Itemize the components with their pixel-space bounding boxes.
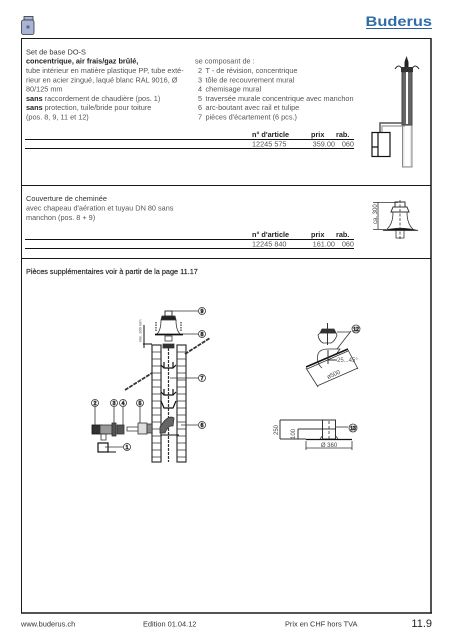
- description: base set: (pos. 8, 9, 11 et 12): [26, 112, 89, 122]
- footer: Edition 01.04.12: [143, 620, 196, 628]
- price table: base set: n° d'article: [252, 130, 289, 139]
- price table: chimney cover: n° d'article: [252, 230, 289, 239]
- diagram: pitched roof tile: 12: [353, 327, 359, 333]
- position callouts: 5: [139, 401, 142, 407]
- price table: chimney cover: 12245 840: [252, 239, 286, 248]
- roof cap: [155, 311, 183, 348]
- diagram: installation in chimney: [92, 308, 210, 462]
- position callouts: 6: [201, 423, 204, 429]
- price table: base set: 359.00: [313, 139, 335, 148]
- diagram: pitched roof tile: 25...45°: [337, 358, 358, 364]
- footer: Prix en CHF hors TVA: [285, 620, 357, 628]
- parts list: [195, 57, 354, 122]
- position callouts: 8: [201, 332, 204, 338]
- diagram: flat roof tile: 100: [291, 428, 297, 439]
- leader lines: [95, 311, 198, 447]
- description: chimney cover: [26, 204, 174, 222]
- description: chimney cover: avec chapeau d'aération et tuyau DN 80 sans: [26, 204, 174, 212]
- price table: base set: rab.: [336, 130, 349, 139]
- logo: Buderus: Buderus: [366, 14, 432, 29]
- diagram: flat roof tile: 13: [350, 426, 356, 432]
- description: base set: [26, 57, 184, 122]
- price table: base set: 060: [342, 139, 354, 148]
- price table: chimney cover: rab.: [336, 230, 349, 239]
- price table: base set: 12245 575: [252, 139, 286, 148]
- description: chimney cover: manchon (pos. 8 + 9): [26, 213, 95, 222]
- price table: chimney cover: prix: [311, 230, 324, 239]
- boiler connection: [92, 417, 179, 452]
- parts list: 7: [198, 112, 202, 122]
- price table: chimney cover: 060: [342, 239, 354, 248]
- parts list: 5: [198, 94, 202, 103]
- description: base set: 80/125 mm: [26, 85, 63, 94]
- price table: chimney cover: 161.00: [313, 239, 335, 248]
- brick walls: [152, 345, 186, 462]
- position callouts: 1: [126, 445, 129, 451]
- description: base set: sans raccordement de chaudière (pos. 1): [26, 94, 160, 103]
- position callouts: 7: [201, 376, 204, 382]
- heading: chimney cover: Couverture de cheminée: [26, 194, 107, 203]
- parts list: pièces d'écartement (6 pcs.): [206, 112, 297, 122]
- flue pipe: [161, 348, 176, 462]
- description: base set: rieur en acier zingué, laqué blanc RAL 9016, Ø: [26, 75, 178, 84]
- parts list: 3: [198, 75, 202, 84]
- price table: chimney cover: [25, 230, 354, 249]
- position callouts: 3: [113, 401, 116, 407]
- position callouts: 9: [201, 309, 204, 315]
- parts list: arc-boutant avec rail et tulipe: [206, 103, 299, 112]
- panel: chimney cover: [25, 194, 418, 249]
- footer: 11.9: [411, 618, 432, 630]
- footer: [20, 618, 432, 630]
- dimension: [138, 320, 152, 348]
- description: base set: concentrique, air frais/gaz brûlé,: [26, 57, 138, 66]
- parts list: traversée murale concentrique avec manchon: [206, 94, 354, 103]
- panel: base set: [25, 48, 419, 167]
- price table: base set: [25, 130, 354, 149]
- description: base set: tube intérieur en matière plastique PP, tube exté-: [26, 66, 184, 75]
- roof strips: [125, 338, 210, 390]
- parts list: 2: [198, 66, 202, 75]
- diagram: flat roof tile: 250: [274, 424, 280, 435]
- position callouts: 2: [94, 401, 97, 407]
- footer: www.buderus.ch: [20, 620, 75, 628]
- diagram: chimney cover dimension: ca. 300: [373, 204, 379, 224]
- diagram: flat roof tile: [274, 420, 357, 450]
- parts list: T - de révision, concentrique: [206, 66, 297, 75]
- parts list: tôle de recouvrement mural: [206, 75, 295, 84]
- parts list: chemisage mural: [206, 85, 261, 94]
- heading: base set: Set de base DO-S: [26, 48, 86, 56]
- position callouts: [92, 308, 206, 451]
- description: base set: sans protection, tuile/bride pour toiture: [26, 103, 151, 112]
- parts list: 6: [198, 103, 202, 112]
- diagram: flue system overview: [372, 56, 419, 167]
- icon: gas tank: [22, 16, 34, 34]
- diagram: flat roof tile: Ø 360: [321, 443, 338, 449]
- diagram: chimney cover dimension: [373, 200, 418, 240]
- price table: base set: prix: [311, 130, 324, 139]
- parts list: se composant de :: [195, 57, 255, 66]
- diagram: pitched roof tile: ø500: [326, 370, 342, 381]
- parts list: 4: [198, 85, 202, 94]
- note: additional parts: Pièces supplémentaires voir à partir de la page 11.17: [26, 267, 198, 276]
- dimension: min. 300 mm: [138, 320, 142, 342]
- diagram: pitched roof tile: [306, 323, 360, 387]
- position callouts: 4: [122, 401, 125, 407]
